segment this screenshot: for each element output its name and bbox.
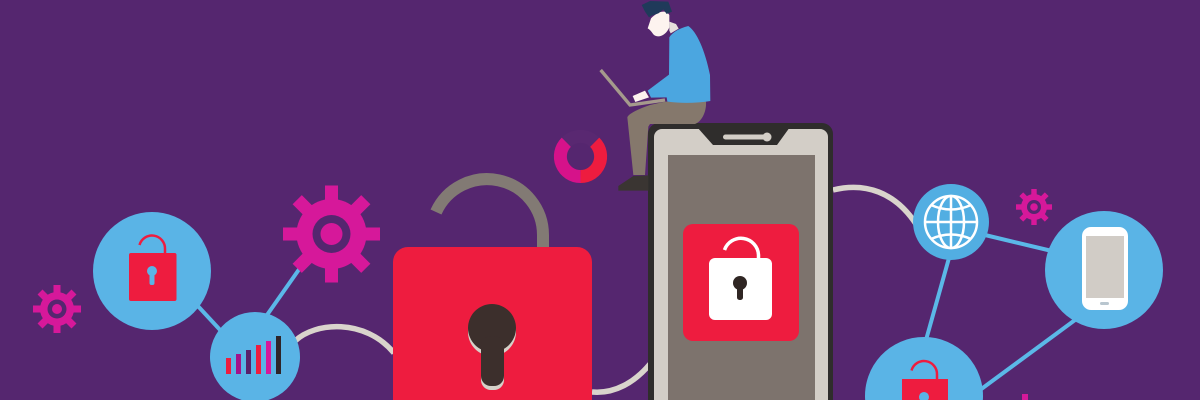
shoe xyxy=(618,175,648,191)
connector lines xyxy=(196,235,1075,390)
app icon: unlocked padlock xyxy=(683,224,799,341)
smartphone xyxy=(648,123,833,400)
face xyxy=(648,12,669,36)
laptop xyxy=(601,70,665,105)
collar xyxy=(669,22,679,33)
person sitting with laptop xyxy=(601,1,710,191)
donut chart xyxy=(560,136,601,177)
icon: large gear xyxy=(283,186,380,282)
hair xyxy=(642,1,672,17)
icon: globe in blue circle xyxy=(913,184,989,260)
icon: small gear right xyxy=(1016,189,1052,225)
icon: lock in blue circle xyxy=(93,212,211,330)
network cables xyxy=(295,187,916,392)
sweater xyxy=(648,26,710,103)
large padlock xyxy=(393,179,592,400)
bar chart in blue circle xyxy=(210,312,300,400)
icon: smartphone in blue circle xyxy=(1045,211,1163,329)
icon: small gear left xyxy=(33,285,81,333)
hand xyxy=(633,91,649,102)
cut-off magenta mark xyxy=(1022,394,1028,400)
icon: lock in bottom blue circle xyxy=(865,337,983,400)
trousers xyxy=(627,102,706,175)
